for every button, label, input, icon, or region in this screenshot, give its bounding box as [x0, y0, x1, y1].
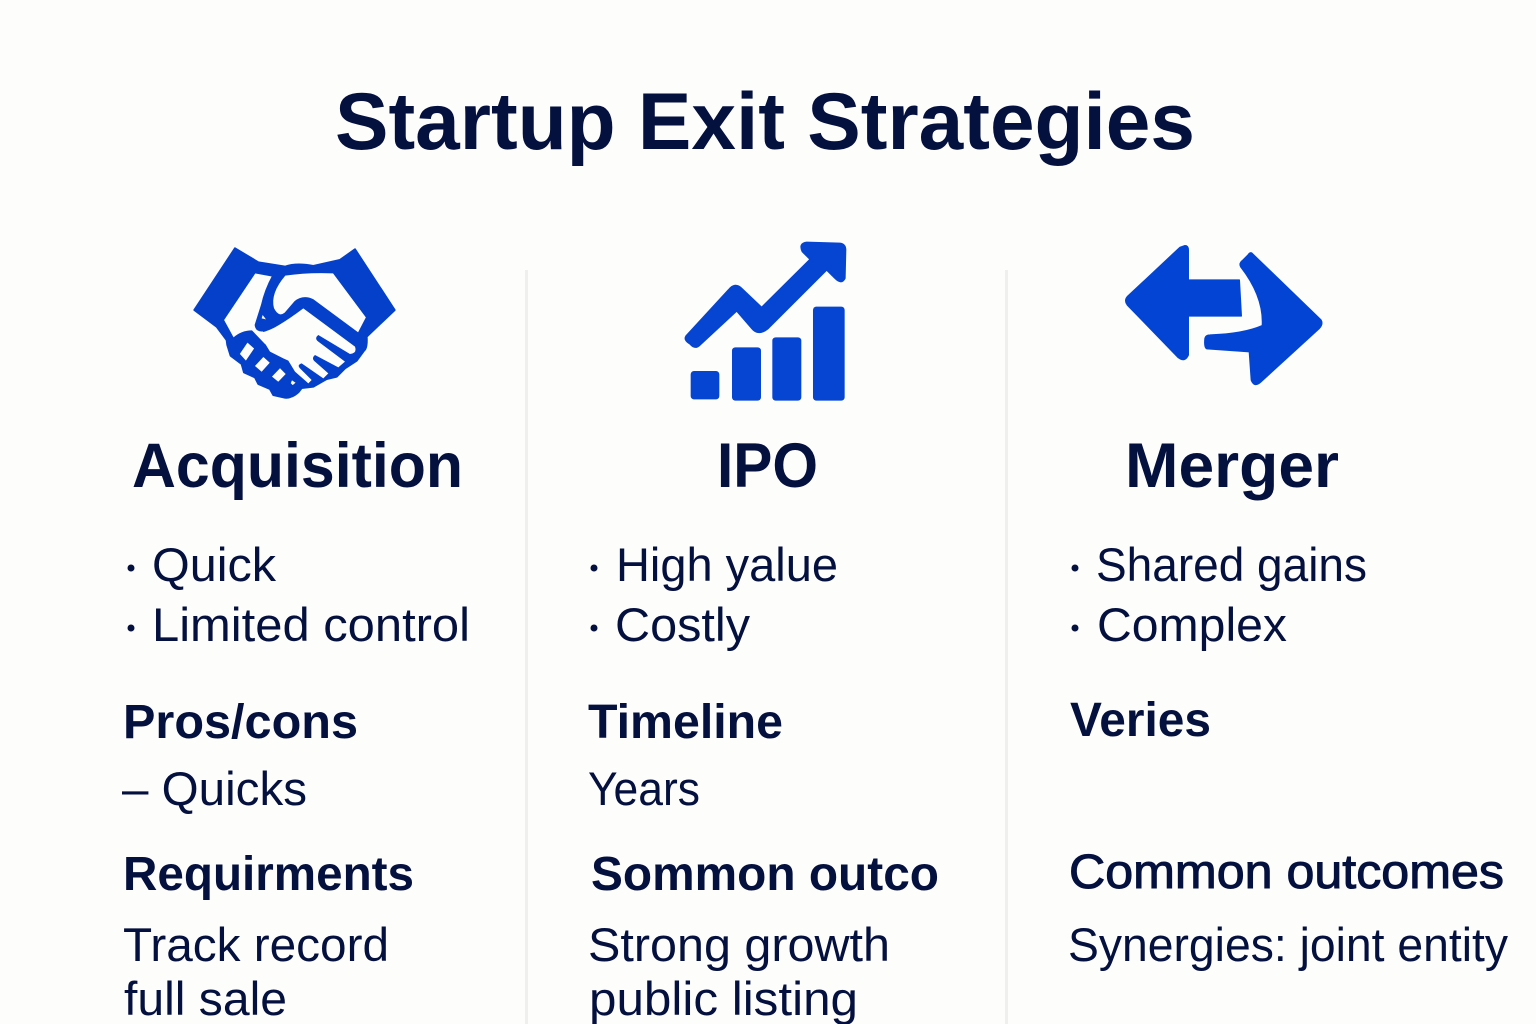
text: Synergies joint entity: Synergies: joint entity: [1068, 918, 1508, 971]
bullet list: IPO: Costly: [615, 598, 751, 651]
bullet list: acquisition: Limited control: [152, 598, 470, 651]
title: Startup Exit Strategies: [335, 77, 1195, 167]
panel: IPO: [588, 242, 939, 1024]
bullet list: acquisition: Quick: [152, 538, 277, 591]
subheading: Veries: Veries: [1070, 694, 1211, 747]
text: Strong growth public listing: [588, 918, 890, 1024]
subheading: Common outcomes: Common outcomes: [1069, 846, 1504, 899]
text: Track record full sale: [123, 918, 389, 1024]
text: Years: Years: [588, 762, 700, 815]
subheading: Timeline: Timeline: [588, 696, 783, 749]
bullet list: merger: Shared gains: [1096, 538, 1367, 591]
bullet list: acquisition: [128, 538, 470, 651]
text: Quicks: – Quicks: [122, 762, 307, 815]
subheading: Pros/cons: Pros/cons: [123, 696, 358, 749]
bullet list: IPO: High yalue: [616, 538, 838, 591]
bullet list: IPO: [590, 538, 838, 651]
subheading: Sommon outco: Sommon outco: [591, 848, 939, 901]
heading: Merger: Merger: [1125, 431, 1339, 501]
text: Strong growth public listing: Strong growth: [588, 918, 890, 971]
text: Track record full sale: Track record: [123, 918, 389, 971]
heading: IPO: IPO: [717, 431, 818, 501]
bullet list: merger: [1072, 538, 1367, 651]
text: Track record full sale: full sale: [124, 972, 287, 1024]
text: Strong growth public listing: public listing: [589, 972, 858, 1024]
icon: handshake: [194, 248, 395, 398]
panel: merger: [1068, 246, 1508, 971]
subheading: Requirments: Requirments: [123, 848, 414, 901]
panel: acquisition: [122, 248, 470, 1024]
icon: merging arrows: [1126, 246, 1322, 384]
icon: growth chart: [685, 242, 846, 401]
bullet list: merger: Complex: [1097, 598, 1287, 651]
heading: Acquisition: Acquisition: [132, 431, 463, 501]
